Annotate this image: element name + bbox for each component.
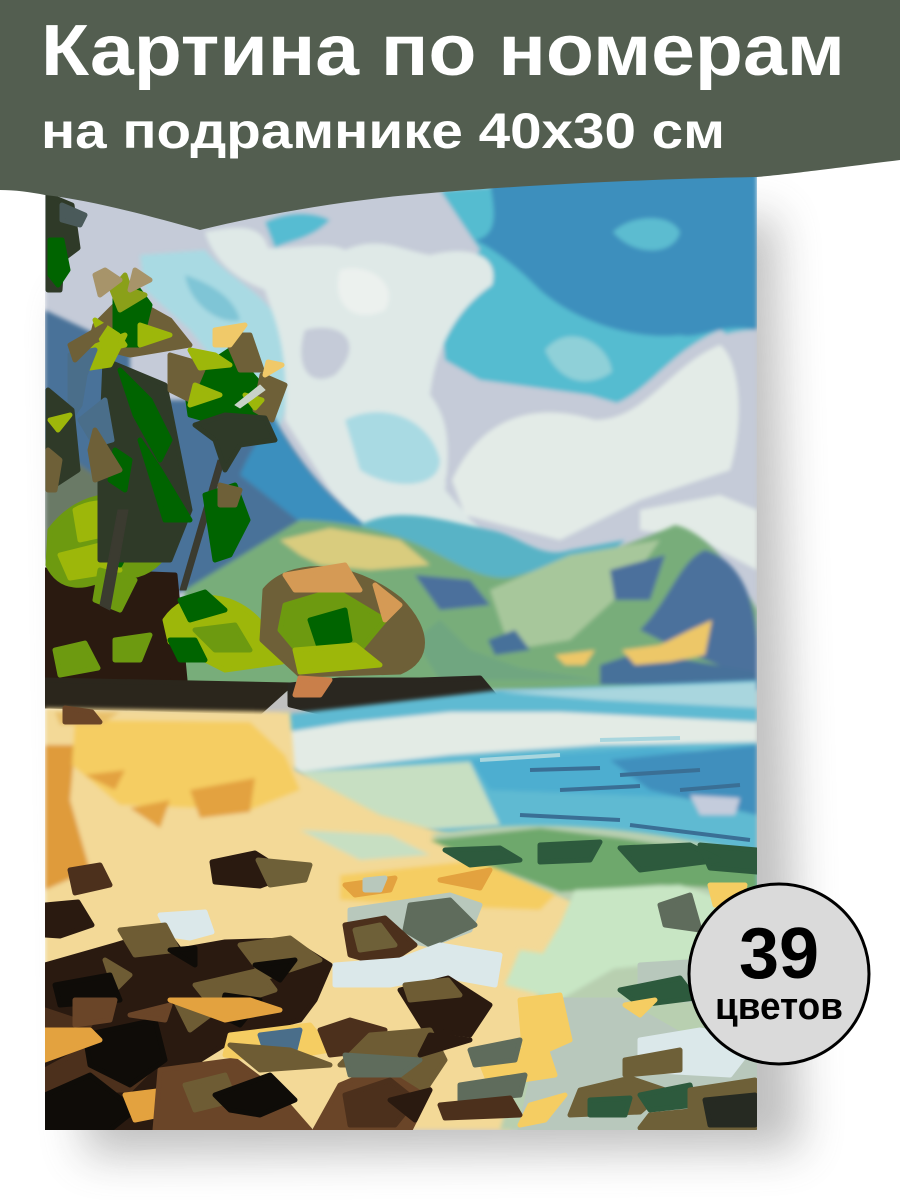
badge: 39 colours <box>689 884 869 1064</box>
sky <box>45 177 757 606</box>
canvas shadow <box>70 215 800 1155</box>
mid-beach stones and sand patches <box>45 708 500 985</box>
sand <box>45 708 575 1130</box>
badge: 39 colours: цветов <box>715 986 843 1028</box>
title: Картина по номерам <box>41 11 845 91</box>
subtitle: на подрамнике 40х30 см <box>41 103 725 159</box>
foreground rocks <box>45 925 490 1130</box>
water ripples <box>480 738 750 840</box>
badge: 39 colours: 39 <box>739 914 819 994</box>
header banner <box>0 0 900 230</box>
mountains <box>45 310 757 690</box>
jungle and headland <box>45 495 496 714</box>
palm trees <box>48 195 285 610</box>
foam and shallow water <box>430 825 757 1130</box>
sea <box>250 680 757 890</box>
shore stones and seaweed <box>440 842 757 1130</box>
painting: tropical beach <box>45 170 757 1130</box>
